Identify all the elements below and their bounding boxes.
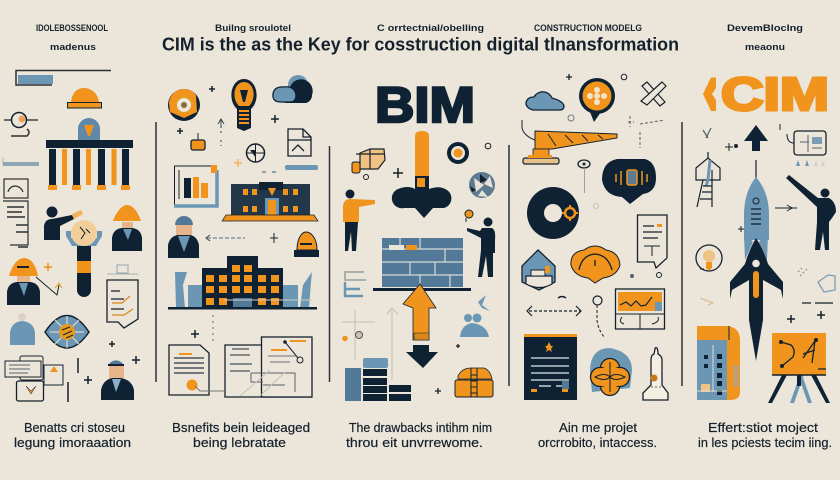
column 4 caption: Ain me projet [559, 420, 637, 435]
panel: column 5 [696, 23, 836, 450]
figure: hard hat worker [112, 205, 142, 251]
icon: text sheet [3, 201, 28, 247]
icon: dashed arrow [177, 86, 279, 146]
icon: bulb badge [696, 143, 744, 305]
column 3 caption: throu eit unvrrewome. [346, 435, 483, 450]
icon: up and down arrows [403, 284, 438, 368]
column 1 caption: Benatts cri stoseu [24, 420, 125, 435]
arrow: dashed left [206, 233, 278, 243]
icon: eye pin [578, 116, 665, 193]
column 5 caption: Effert:stiot moject [708, 420, 818, 435]
icon: helmet [68, 88, 102, 108]
column 4 caption: orcrrobito, intaccess. [538, 435, 657, 450]
icon: report document [169, 345, 224, 395]
icon: brick wall [373, 238, 471, 291]
icon: blue bust [10, 313, 35, 345]
icon: orange cloud brain [571, 246, 620, 283]
BIM logotype: BIM [375, 77, 475, 133]
figure: pointing person [44, 206, 83, 240]
icon: light bulb [231, 79, 257, 131]
icon: document stack [5, 356, 63, 401]
figure: reaching person [786, 175, 836, 250]
figure: bottom worker [68, 341, 140, 402]
column 3 caption: The drawbacks intihm nim [349, 420, 492, 435]
icon: rocket [730, 160, 797, 361]
icon: note document [638, 215, 667, 268]
small bar [234, 159, 318, 172]
line chart panel [616, 289, 664, 329]
column 1 heading: IDOLEBOSSENOOL [36, 23, 108, 33]
icon: navy speech bubble [602, 159, 656, 204]
icon: patterned ball [469, 172, 495, 198]
arrow: dashed double [527, 296, 581, 316]
icon: cloud [273, 75, 313, 103]
icon: target ring [447, 142, 491, 164]
icon: crossed tools [641, 82, 666, 106]
icon: gear [168, 89, 201, 121]
icon: eye target [4, 112, 38, 136]
figure: orange pointing person [343, 190, 375, 251]
CIM logotype: CIM [721, 68, 829, 120]
column 2 caption: Bsnefits bein leideaged [172, 420, 310, 435]
column 2 caption [172, 420, 310, 450]
column 1 caption: legung imoraaation [14, 435, 131, 450]
bar chart [174, 165, 217, 206]
figure: left hard hat worker [7, 258, 62, 305]
icon: building with orange base [222, 182, 318, 221]
icon: blue people [460, 295, 490, 337]
icon: compass [246, 144, 264, 162]
column 1 heading [36, 23, 108, 52]
icon: orange chest [435, 344, 493, 397]
icon: orange book [697, 326, 740, 400]
icon: orange box [191, 133, 205, 150]
panel: column 3 [342, 23, 495, 450]
figure: centre worker [66, 220, 102, 297]
icon: pin with dashed path [593, 272, 662, 338]
icon: institution gate [46, 118, 133, 190]
small marks [787, 268, 835, 323]
icon: blue cloud [526, 92, 564, 110]
figure: right person [465, 210, 495, 277]
icon: crosshair sketch [342, 308, 398, 380]
icon: block stack [345, 358, 411, 401]
icon: quatrefoil flower [590, 348, 632, 396]
column 1 heading: madenus [50, 42, 96, 52]
column 1 caption [14, 420, 131, 450]
arrow: navy up [744, 125, 768, 151]
column 2 caption: being lebratate [193, 435, 286, 450]
column 2 heading: Builng sroulotel [215, 23, 291, 33]
icon: hexagon badge [522, 250, 555, 290]
bar accent [3, 157, 39, 166]
icon: speech circle [566, 74, 627, 122]
panel: column 1 [3, 23, 142, 450]
title: CIM is the as the Key for cosstruction digital tlnansformation [162, 34, 679, 54]
icon: donut with gear [527, 187, 598, 239]
column 4 heading: CONSTRUCTION MODELG [534, 23, 642, 33]
icon: office building [168, 256, 317, 310]
progress bar icon [16, 70, 111, 85]
panel: column 4 [522, 23, 668, 450]
icon: clipboard [107, 265, 138, 328]
column 5 caption: in les pciests tecim iing. [698, 435, 832, 450]
column 5 heading: meaonu [745, 42, 785, 52]
icon: small document [4, 179, 28, 198]
icon: ladder tower [696, 128, 720, 207]
CIM logotype [703, 68, 829, 120]
column 4 caption [538, 420, 657, 450]
column 5 caption [698, 420, 832, 450]
icon: easel board [768, 333, 830, 403]
icon: folded document [288, 129, 311, 156]
icon: download brush column [392, 131, 451, 218]
icon: turbine eye [45, 316, 89, 348]
column 5 heading [727, 23, 803, 52]
icon: hard hat [294, 232, 319, 257]
figure: person bust [168, 216, 199, 258]
icon: overlapping plans [191, 300, 312, 397]
panel: column 2 [168, 23, 319, 450]
column 3 heading: C orrtectnial/obelling [377, 23, 484, 33]
icon: bottle [643, 348, 668, 400]
column 5 heading: DevemBlocIng [727, 23, 803, 33]
icon: blueprint card [780, 124, 826, 166]
column 3 caption [346, 420, 492, 450]
icon: blue E shape [345, 272, 366, 296]
icon: crane [522, 115, 617, 164]
icon: crate [352, 149, 403, 180]
icon: navy document [524, 334, 577, 400]
